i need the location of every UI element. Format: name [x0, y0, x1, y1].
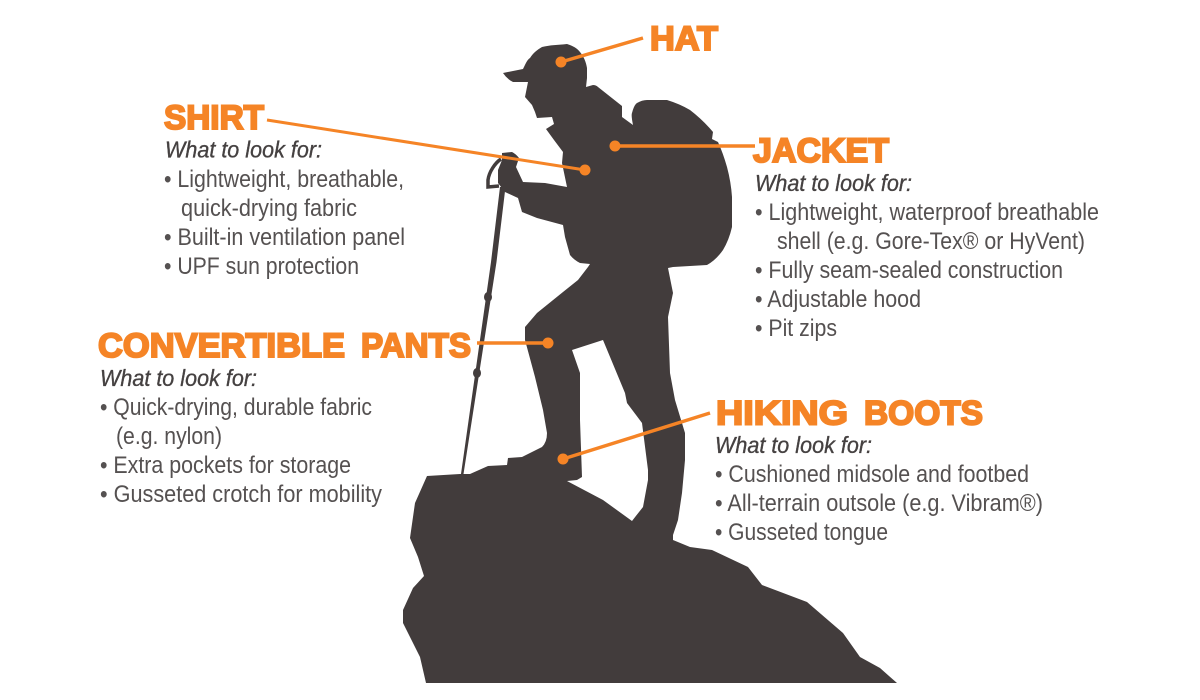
text: jacket details — [755, 170, 1099, 342]
text: pants details: What to look for: — [100, 365, 257, 391]
text: pants details: • Gusseted crotch for mobility — [100, 481, 382, 508]
text: jacket details: • Fully seam-sealed construction — [755, 257, 1063, 284]
text: pants details: • Extra pockets for storage — [100, 452, 351, 479]
text: pants details: • Quick-drying, durable fabric — [100, 394, 372, 421]
text: boots details: • All-terrain outsole (e.g. Vibram®) — [715, 490, 1043, 517]
heading: jacket: JACKET — [753, 132, 889, 170]
text: shirt details: • Lightweight, breathable, — [164, 166, 404, 193]
text: shirt details: • UPF sun protection — [164, 253, 359, 280]
heading: hiking boots — [716, 394, 983, 432]
text: boots details: • Cushioned midsole and footbed — [715, 461, 1029, 488]
heading: convertible pants: PANTS — [361, 327, 471, 365]
callout: hat — [556, 20, 718, 68]
text: jacket details: • Adjustable hood — [755, 286, 921, 313]
heading: hiking boots: BOOTS — [864, 394, 983, 432]
text: boots details — [715, 432, 1043, 546]
text: shirt details — [164, 136, 405, 280]
text: jacket details: shell (e.g. Gore-Tex® or HyVent) — [777, 228, 1085, 255]
heading: hiking boots: HIKING — [716, 394, 848, 432]
text: shirt details: quick-drying fabric — [181, 195, 357, 222]
callout: jacket — [610, 132, 1099, 342]
text: boots details: • Gusseted tongue — [715, 519, 888, 546]
text: shirt details: • Built-in ventilation panel — [164, 224, 405, 251]
heading: convertible pants — [98, 327, 471, 365]
text: boots details: What to look for: — [715, 432, 872, 458]
text: shirt details: What to look for: — [165, 136, 322, 162]
heading: convertible pants: CONVERTIBLE — [98, 327, 345, 365]
text: pants details — [100, 365, 382, 508]
icon: trekking pole — [461, 159, 506, 474]
callout: convertible pants — [98, 327, 554, 508]
text: pants details: (e.g. nylon) — [116, 423, 222, 450]
heading: shirt: SHIRT — [164, 99, 264, 137]
text: jacket details: • Lightweight, waterproof breathable — [755, 199, 1099, 226]
heading: hat: HAT — [650, 20, 718, 58]
text: jacket details: What to look for: — [755, 170, 912, 196]
hiker silhouette on rock — [403, 44, 897, 683]
callout: shirt — [164, 99, 590, 280]
callout: hiking boots — [558, 394, 1043, 546]
text: jacket details: • Pit zips — [755, 315, 837, 342]
